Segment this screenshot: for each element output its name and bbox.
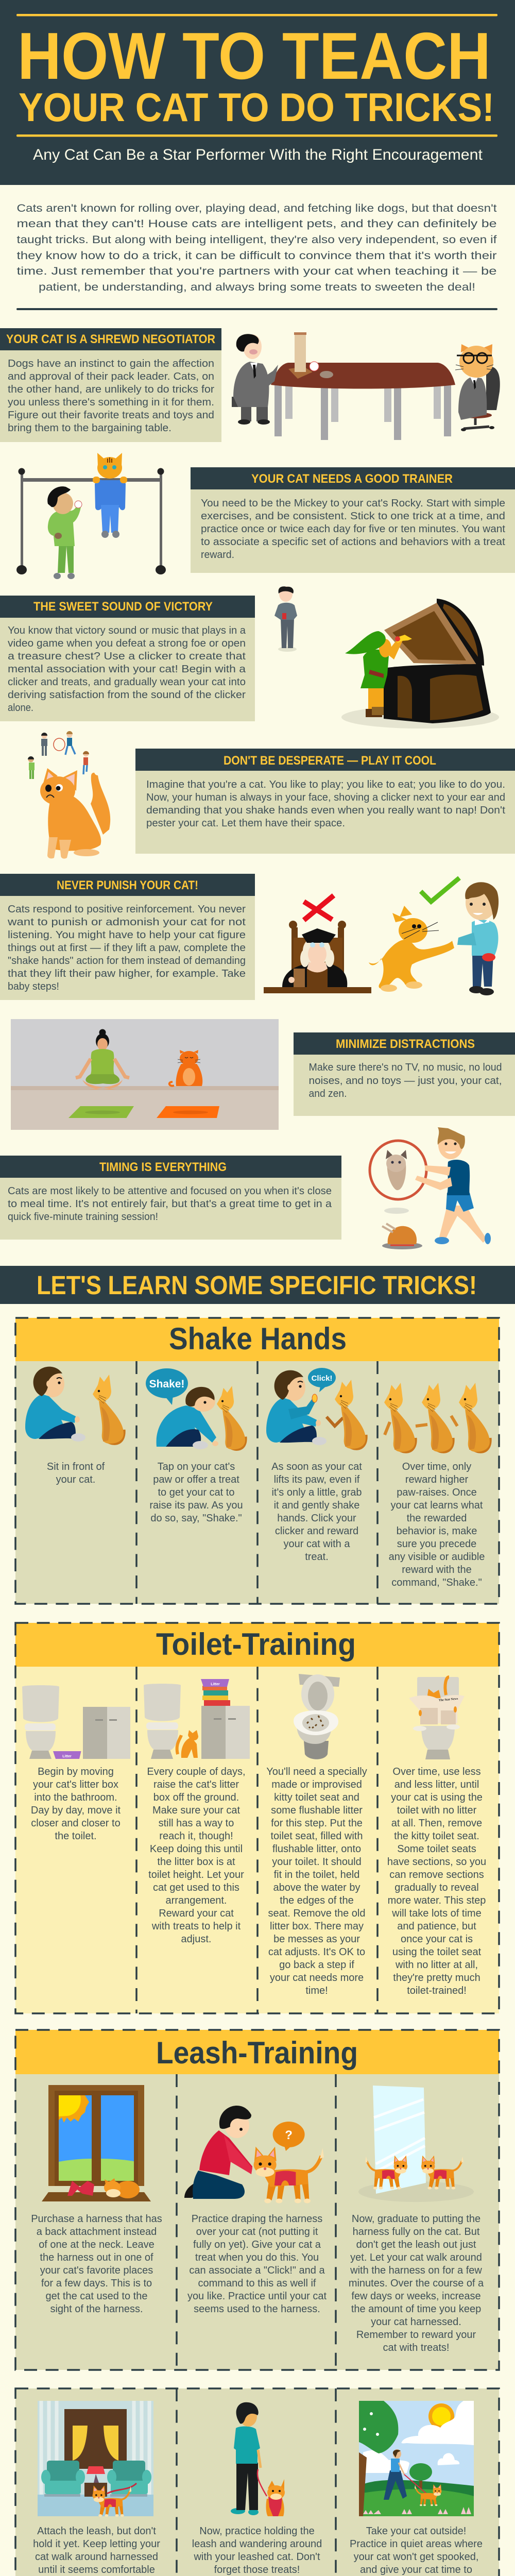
text block: [8, 625, 246, 714]
step 3 text: yet. Let your cat walk around: [350, 2252, 482, 2263]
text block: Make sure there's no TV, no music, no loud: [309, 1062, 502, 1073]
step 4 text: cat walk around harnessed: [35, 2551, 158, 2563]
step 2 text: cat get used to this: [153, 1882, 239, 1893]
heading: DON'T BE DESPERATE — PLAY IT COOL: [224, 754, 436, 768]
step 3 text: your toilet. It should: [272, 1856, 362, 1868]
step 1 text: your cat's favorite places: [40, 2265, 153, 2276]
subtitle: Any Cat Can Be a Star Performer With the Right Encouragement: [33, 146, 483, 163]
text block: You know that victory sound or music that plays in a: [8, 625, 246, 636]
step 4 text: Over time, only: [402, 1461, 471, 1472]
red cross: [304, 895, 334, 920]
step 5 text: forget those treats!: [214, 2564, 300, 2575]
text block: [7, 904, 246, 992]
step 4 text: Some toilet seats: [397, 1843, 476, 1855]
text block: Dogs have an instinct to gain the affection: [8, 358, 214, 369]
step 2 text: raise its paw. As you: [149, 1500, 243, 1511]
text block: video game when you defeat a strong foe or open: [8, 638, 246, 649]
step 2 text: over your cat (not putting it: [196, 2226, 318, 2238]
step 2 text: box off the ground.: [153, 1792, 239, 1803]
step 4 text: and less litter, until: [394, 1779, 479, 1790]
heading: YOUR CAT NEEDS A GOOD TRAINER: [251, 472, 453, 486]
step 2 text: Reward your cat: [159, 1908, 234, 1919]
text block: reward.: [201, 549, 234, 561]
panel: minimize distractions: [294, 1032, 515, 1116]
step 3 text: Remember to reward your: [356, 2329, 476, 2341]
heading: THE SWEET SOUND OF VICTORY: [33, 600, 213, 614]
heading: YOUR CAT IS A SHREWD NEGOTIATOR: [6, 332, 215, 346]
step 1 text: your cat.: [56, 1474, 95, 1485]
text block: Now, your human is always in your face, shoving a clicker next to your ear and: [146, 792, 505, 803]
step 4 text: until it seems comfortable: [38, 2564, 155, 2575]
step 3 text: As soon as your cat: [271, 1461, 362, 1472]
step 5 text: Now, practice holding the: [199, 2526, 315, 2537]
step 3 text: lifts its paw, even if: [274, 1474, 360, 1485]
step 2 text: treat when you do this. You: [195, 2252, 319, 2263]
step 4 text: using the toilet seat: [392, 1946, 482, 1958]
step 3 text: toilet seat, filled with: [271, 1831, 363, 1842]
step 3 text: with the harness on for a few: [350, 2265, 482, 2276]
step 2 text: still has a way to: [159, 1818, 234, 1829]
text block: quick five-minute training session!: [8, 1211, 158, 1223]
step 4 text: sure you precede: [397, 1538, 476, 1550]
intro text block: [16, 202, 497, 293]
step 4 text: the rewarded: [407, 1513, 467, 1524]
step 2 text: Tap on your cat's: [158, 1461, 235, 1472]
text block: things out at first — if they lift a paw, complete the: [8, 942, 246, 954]
step 3 text: it's only a little, grab: [271, 1487, 362, 1498]
step 3 text: minutes. Over the course of a: [349, 2278, 484, 2289]
step 4 text: they're pretty much: [393, 1972, 480, 1984]
step 6 text: Practice in quiet areas where: [350, 2538, 483, 2550]
text block: Figure out their favorite treats and toys and: [8, 410, 214, 421]
step 4 text: the kitty toilet seat.: [394, 1831, 479, 1842]
step 2 text: seems used to the harness.: [194, 2303, 320, 2315]
step 3 text: go back a step if: [279, 1959, 354, 1971]
illustration: boy holding hoop, cat jumping, turkey treat: [370, 1127, 491, 1249]
step 2 text: command to this as well if: [198, 2278, 316, 2289]
illustration: negotiation table with man and cat: [232, 332, 500, 440]
heading: Leash-Training: [156, 2036, 358, 2070]
panel: don't be desperate: [135, 749, 515, 854]
step 3 text: few days or weeks, increase: [351, 2291, 481, 2302]
step 3 text: cat adjusts. It's OK to: [268, 1946, 365, 1958]
step 2 text: to get your cat to: [158, 1487, 234, 1498]
step 1 text: get the cat used to the: [46, 2291, 147, 2302]
step 3 text: cat with treats!: [383, 2342, 449, 2353]
text block: Imagine that you're a cat. You like to play; you like to eat; you like to do you.: [146, 779, 505, 790]
cat hanging from bar: [93, 453, 127, 538]
boy: [415, 1127, 491, 1244]
sitting cat with harness: [266, 2479, 285, 2516]
step 4 text: and patience, but: [397, 1921, 476, 1932]
text block: noises, and no toys — just you, your cat,: [309, 1075, 502, 1087]
step 3 illustration: toilet with kitty seat from above: [294, 1674, 340, 1759]
text block: clicker and treats, and gradually wean your cat into: [8, 676, 246, 688]
text block: the other hand, are unlikely to do tricks for: [8, 384, 214, 395]
step 3 illustration: cat with harness looking in mirror: [358, 2086, 474, 2202]
step 4 text: any visible or audible: [389, 1551, 485, 1563]
step 2 text: reach it, though!: [159, 1831, 233, 1842]
illustration: cat ignoring small people: [28, 731, 110, 859]
question bubble: ?: [285, 2128, 293, 2142]
step 5 illustration: man holding leash with cat: [231, 2402, 285, 2516]
step 3 text: Now, graduate to putting the: [352, 2213, 480, 2225]
step 4 text: Attach the leash, but don't: [37, 2526, 156, 2537]
step 6 text: Take your cat outside!: [366, 2526, 466, 2537]
text block: listening. You might have to help your cat figure: [8, 929, 246, 941]
step 3 text: fit in the toilet, held: [274, 1869, 359, 1880]
intro text block: time. Just remember that you're partners with your cat when teaching it — be: [16, 265, 496, 277]
step 5 text: with your leashed cat. Don't: [193, 2551, 320, 2563]
panel: leash-training part one: [15, 2030, 499, 2370]
step 4 text: command, "Shake.": [391, 1577, 482, 1588]
harness on sill: [67, 2181, 94, 2196]
clouds: [401, 2401, 474, 2445]
man: [457, 882, 499, 995]
step 1 text: a back attachment instead: [37, 2226, 157, 2238]
step 2 text: raise the cat's litter: [153, 1779, 239, 1790]
step 4 text: toilet-trained!: [407, 1985, 467, 1996]
step 3 text: kitty toilet seat and: [274, 1792, 359, 1803]
step 1 text: Purchase a harness that has: [31, 2213, 162, 2225]
green check: [421, 878, 459, 902]
man in suit: [232, 334, 278, 425]
step 4 text: paw-raises. Once: [397, 1487, 477, 1498]
step 4 illustration: cat reading newspaper on toilet: The Star News: [439, 1698, 458, 1702]
step 4 illustration: three cats raising paw higher: [384, 1383, 490, 1452]
text block: alone.: [8, 702, 33, 714]
step 3 text: for this step. Put the: [271, 1818, 363, 1829]
step 2 text: Make sure your cat: [152, 1805, 240, 1816]
heading: Shake Hands: [169, 1321, 347, 1356]
step 6 illustration: outdoor park walk: [359, 2401, 474, 2516]
text block: Cats are most likely to be attentive and focused on you when it's close: [8, 1185, 332, 1197]
panel: your cat is a shrewd negotiator: [0, 328, 221, 442]
illustration: cat pull-up training with boy: [16, 453, 166, 579]
step 1 illustration: toilet, litter box, cabinet: [22, 1685, 130, 1759]
step 2 text: toilet height. Let your: [148, 1869, 244, 1880]
text block: [146, 779, 505, 829]
step 4 text: can remove sections: [389, 1869, 484, 1880]
roast turkey: [382, 1224, 422, 1249]
step 2 illustration: boy tapping cat paw with Shake bubble: [146, 1368, 245, 1449]
step 3 text: You'll need a specially: [266, 1766, 367, 1777]
step 2 text: paw or offer a treat: [153, 1474, 239, 1485]
step 3 text: the edges of the: [280, 1895, 354, 1906]
intro text block: mean that they can't! House cats are intelligent pets, and they can definitely be: [16, 218, 497, 230]
text block: [8, 358, 214, 434]
text block: [201, 498, 505, 561]
step 1 text: into the bathroom.: [34, 1792, 117, 1803]
illustration: man with clicker: [274, 586, 297, 652]
text block: want to punish or admonish your cat for not: [7, 917, 246, 928]
adventurer cat: [345, 631, 412, 717]
text block: you unless there's something in it for them.: [8, 397, 214, 408]
small people: [28, 731, 89, 779]
text block: demanding that you shake hands even when you really want to nap! Don't: [146, 805, 505, 816]
judge: [264, 921, 371, 993]
intro text block: patient, be understanding, and always bring some treats to sweeten the deal!: [39, 281, 475, 293]
step 2 illustration: man draping harness on cat: [184, 2106, 324, 2203]
step 3 text: some flushable litter: [271, 1805, 363, 1816]
step 2 text: Practice draping the harness: [192, 2213, 322, 2225]
sun: [428, 2403, 454, 2429]
step 4 text: at all. Then, remove: [391, 1818, 482, 1829]
tree: [359, 2452, 367, 2516]
step 6 text: and give your cat time to: [360, 2564, 472, 2575]
step 1 illustration: toilet, litter box, cabinet: Litter: [62, 1755, 72, 1758]
step 4 text: once your cat is: [401, 1934, 473, 1945]
step 1 text: sight of the harness.: [50, 2303, 143, 2315]
panel: shake hands: [15, 1318, 499, 1604]
step 3 text: don't get the leash out just: [356, 2239, 476, 2250]
step 2 illustration: boy tapping cat paw with Shake bubble: Shake!: [149, 1378, 184, 1390]
intro text block: they know how to do a trick, it can be difficult to convince them that it's worth their: [16, 250, 497, 262]
step 2 illustration: toilet, cat, raised litter on books: Litter: [211, 1683, 220, 1686]
text block: and zen.: [309, 1088, 347, 1099]
step 3 text: your cat harnessed.: [371, 2316, 461, 2328]
step 3 text: litter box. There may: [270, 1921, 364, 1932]
step 4 text: behavior is, make: [397, 1526, 477, 1537]
panel: timing is everything: [0, 1156, 341, 1240]
panel: never punish your cat: [0, 874, 255, 1000]
step 4 text: reward higher: [405, 1474, 468, 1485]
step 4 text: Over time, use less: [392, 1766, 481, 1777]
step 4 text: with no litter at all,: [395, 1959, 478, 1971]
step 3 text: time!: [305, 1985, 328, 1996]
step 5 text: leash and wandering around: [192, 2538, 322, 2550]
step 4 text: your cat learns what: [391, 1500, 483, 1511]
text block: to meal time. It's not entirely fair, but that's a great time to get in a: [8, 1198, 332, 1210]
step 3 text: your cat needs more: [270, 1972, 364, 1984]
panel: your cat needs a good trainer: [191, 467, 515, 573]
panel: leash-training part two: [15, 2388, 499, 2576]
step 3 text: clicker and reward: [275, 1526, 358, 1537]
step 3 text: be messes as your: [273, 1934, 360, 1945]
text block: Cats respond to positive reinforcement. You never: [8, 904, 246, 915]
step 1 text: of one at the neck. Leave: [39, 2239, 154, 2250]
step 3 text: made or improvised: [271, 1779, 362, 1790]
meditating cat: [169, 1050, 202, 1086]
step 3 text: treat.: [305, 1551, 329, 1563]
step 2 text: with treats to help it: [151, 1921, 241, 1932]
armchairs: [41, 2461, 151, 2497]
boy with clicker: [47, 486, 82, 579]
step 3 illustration: boy clicking while shaking paw: Click!: [312, 1374, 332, 1383]
question bubble: [273, 2122, 305, 2151]
step 4 text: more water. This step: [388, 1895, 486, 1906]
text block: practice once or twice each day for five or ten minutes. You want: [201, 523, 505, 535]
orange cat: [177, 1730, 198, 1758]
illustration: woman and cat meditating: [11, 1019, 279, 1130]
text block: baby steps!: [8, 981, 59, 992]
step 4 text: gradually to reveal: [394, 1882, 479, 1893]
step 4 illustration: cat reading newspaper on toilet: [409, 1677, 465, 1759]
text block: to associate a specific set of actions and behaviors with a treat: [201, 536, 505, 548]
illustration: treasure chest with adventurer cat: [341, 599, 499, 728]
text block: deriving satisfaction from the sound of the clicker: [8, 689, 246, 701]
title: [18, 19, 494, 130]
heading: TIMING IS EVERYTHING: [99, 1160, 227, 1174]
step 4 text: your cat is using the: [391, 1792, 483, 1803]
step 3 text: above the water by: [273, 1882, 360, 1893]
intro text block: Cats aren't known for rolling over, playing dead, and fetching like dogs, but that doesn't: [16, 202, 497, 214]
step 4 text: hold it yet. Keep letting your: [33, 2538, 160, 2550]
step 3 text: your cat with a: [284, 1538, 350, 1550]
text block: "shake hands" action for them instead of demanding: [8, 955, 246, 967]
panel: title header: [0, 0, 515, 185]
cat in suit: [455, 344, 500, 431]
step 1 text: the harness out in one of: [40, 2252, 153, 2263]
illustration: judge with red cross versus man shaking cat paw with green check: [264, 878, 499, 995]
step 2 text: the litter box is at: [157, 1856, 235, 1868]
step 2 text: adjust.: [181, 1934, 211, 1945]
text block: mental association with your cat! Begin with a: [8, 664, 246, 675]
step 1 text: Begin by moving: [38, 1766, 114, 1777]
step 1 illustration: boy sitting facing cat: [25, 1367, 124, 1444]
step 2 text: you like. Practice until your cat: [187, 2291, 327, 2302]
text block: [309, 1062, 502, 1099]
sleeping cat on sill: [104, 2178, 140, 2198]
heading: MINIMIZE DISTRACTIONS: [336, 1037, 475, 1051]
meditating woman: [76, 1029, 129, 1090]
text block: and approval of their pack leader. Cats, on: [8, 371, 214, 382]
intro text block: taught tricks. But along with being intelligent, they're also very independent, so even if: [16, 234, 497, 246]
panel: toilet-training: [15, 1623, 499, 2013]
step 1 text: Sit in front of: [47, 1461, 105, 1472]
panel: the sweet sound of victory: [0, 596, 255, 721]
text block: bring them to the bargaining table.: [8, 422, 171, 434]
heading: Toilet-Training: [156, 1627, 356, 1662]
step 1 text: the toilet.: [55, 1831, 97, 1842]
text block: a treasure chest? Use a clicker to create that: [8, 651, 246, 662]
step 1 text: your cat's litter box: [33, 1779, 118, 1790]
step 3 text: the amount of time you keep: [351, 2303, 481, 2315]
heading: NEVER PUNISH YOUR CAT!: [57, 878, 198, 892]
step 2 illustration: toilet, cat, raised litter on books: [144, 1679, 250, 1759]
text block: You need to be the Mickey to your cat's Rocky. Start with simple: [201, 498, 505, 509]
big orange cat: [40, 768, 110, 859]
step 4 text: reward with the: [402, 1564, 472, 1575]
text block: that they lift their paw higher, for example. Take: [8, 968, 246, 979]
step 3 text: flushable litter, onto: [272, 1843, 361, 1855]
step 6 text: your cat won't get spooked,: [354, 2551, 478, 2563]
text block: exercises, and be consistent. Stick to one trick at a time, and: [201, 511, 505, 522]
step 4 text: will take lots of time: [391, 1908, 482, 1919]
walker: [384, 2449, 426, 2500]
step 3 text: it and gently shake: [274, 1500, 359, 1511]
step 4 illustration: living room with leashed cat: [38, 2401, 153, 2517]
step 4 text: have sections, so you: [387, 1856, 486, 1868]
cat jumping through hoop: [386, 1150, 407, 1190]
text block: [8, 1185, 332, 1223]
step 4 text: toilet with no litter: [397, 1805, 477, 1816]
step 1 text: Day by day, move it: [31, 1805, 121, 1816]
text block: pester your cat. Let them have their space.: [146, 818, 345, 829]
step 2 text: Keep doing this until: [150, 1843, 243, 1855]
step 1 text: closer and closer to: [31, 1818, 121, 1829]
step 3 text: hands. Click your: [277, 1513, 356, 1524]
step 2 text: can associate a "Click!" and a: [189, 2265, 325, 2276]
step 2 text: fully on yet). Give your cat a: [193, 2239, 321, 2250]
step 2 text: arrangement.: [166, 1895, 227, 1906]
step 2 text: do so, say, "Shake.": [150, 1513, 242, 1524]
step 3 text: seat. Remove the old: [268, 1908, 366, 1919]
step 1 text: for a few days. This is to: [41, 2278, 152, 2289]
step 1 illustration: window with harness and sleeping cat: [42, 2085, 151, 2201]
step 3 text: harness fully on the cat. But: [353, 2226, 480, 2238]
step 2 text: Every couple of days,: [147, 1766, 246, 1777]
step 3 illustration: boy clicking while shaking paw: [266, 1368, 366, 1449]
orange cat shaking hand: [369, 906, 454, 992]
